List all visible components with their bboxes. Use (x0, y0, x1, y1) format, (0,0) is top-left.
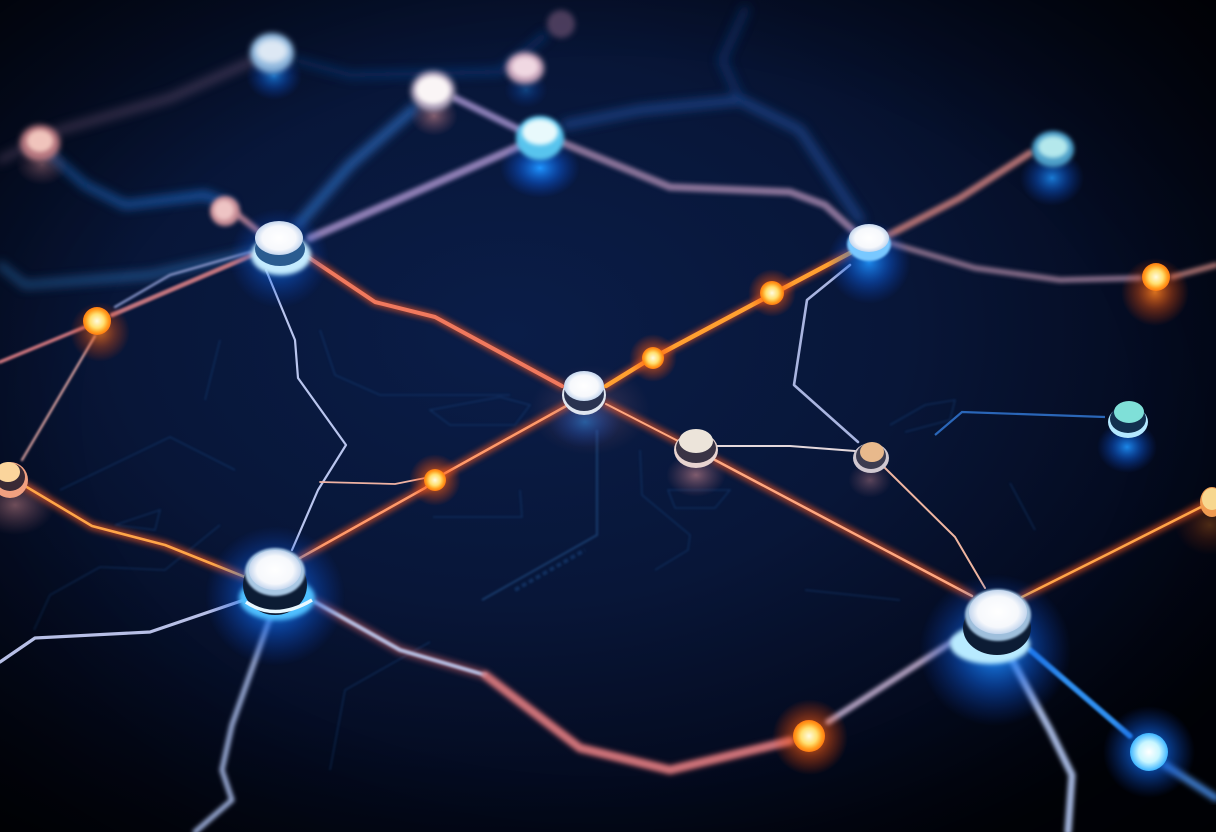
node: small pink (210, 196, 240, 226)
node: top right cyan (1020, 131, 1084, 206)
line: top node to centre (308, 257, 562, 386)
node: left edge orange (0, 462, 28, 498)
sharper left pink lines (0, 252, 255, 460)
soft pink-lilac network lines (238, 98, 1216, 280)
node: small right tan (848, 442, 892, 498)
node: top-left blue-white (246, 33, 302, 100)
thin white-lilac lines (0, 265, 985, 832)
line: centre to upper right (606, 253, 850, 386)
node: top small pink (504, 52, 548, 108)
node: left pink (16, 125, 68, 185)
line: lower right to right edge (1022, 505, 1205, 597)
node: top pink-white (410, 71, 458, 136)
node: lower-right hub (919, 574, 1071, 726)
node: lower-left hub (205, 526, 345, 666)
node: large upper left (229, 208, 329, 308)
node: right cyan ring (1097, 401, 1157, 473)
faint background glow behind nodes (0, 365, 1216, 555)
node: centre hub (549, 371, 621, 448)
orange dots (70, 258, 1189, 775)
node: lower-right cyan dot (1103, 706, 1195, 798)
faint circuit traces (34, 330, 1035, 770)
node: right edge orange (1200, 487, 1216, 517)
line: left to lower left (25, 486, 245, 577)
trace: right blue circuit line (935, 412, 1105, 435)
node: right of centre (666, 429, 726, 497)
line: centre to lower right (715, 460, 972, 596)
node: far top blurred (547, 10, 575, 38)
blurred blue background lines (0, 10, 860, 285)
node: upper right hub (827, 220, 911, 304)
line: lower left to centre (300, 405, 568, 558)
glowing lines: orange (25, 253, 1205, 597)
node: top centre cyan (500, 116, 580, 198)
bottom pink line (315, 602, 1216, 832)
